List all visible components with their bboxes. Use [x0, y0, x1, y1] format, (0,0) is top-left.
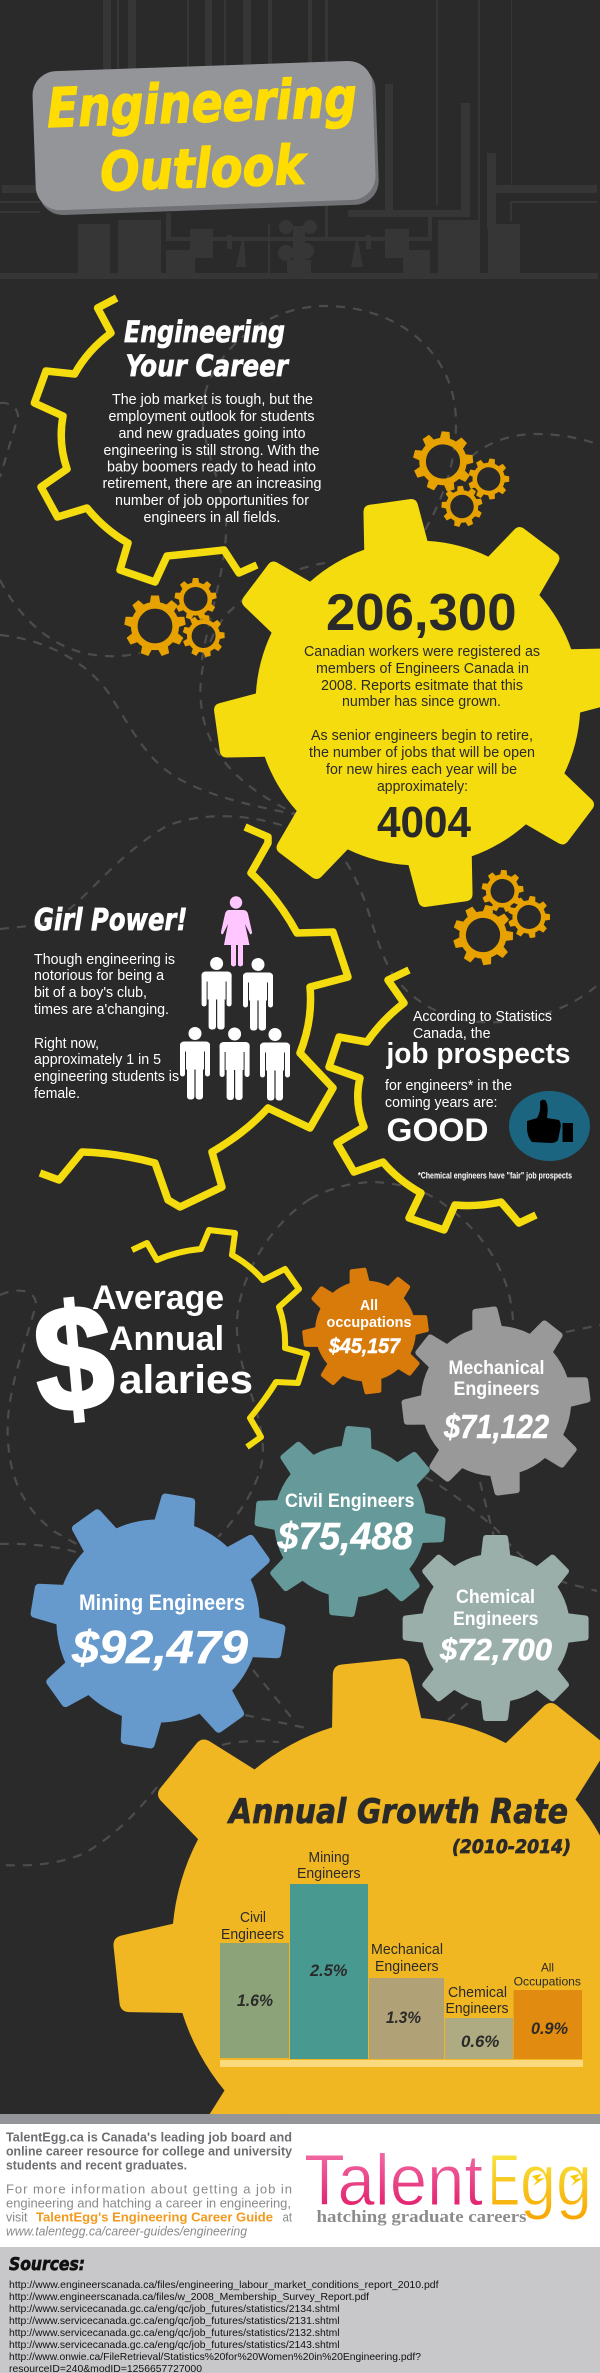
job prospects intro: Canada, the — [413, 1026, 490, 1042]
outline gear: girl power — [40, 827, 348, 1207]
job prospects intro — [385, 1009, 552, 1111]
bar chart: Engineers — [375, 1959, 439, 1975]
girl power paragraph: times are a'changing. — [34, 1002, 169, 1018]
gear: mechanical engineers salary: Engineers — [454, 1379, 540, 1400]
stat description: members of Engineers Canada in — [316, 661, 529, 677]
gear: chemical engineers salary — [403, 1535, 589, 1721]
panel: engineering your career — [34, 298, 322, 582]
stat description: approximately: — [377, 779, 468, 795]
heading: engineering your career: Engineering — [124, 315, 285, 349]
heading: average annual salaries — [92, 1279, 253, 1402]
sources list — [9, 2279, 439, 2373]
talentegg description: TalentEgg.ca is Canada's leading job board and — [6, 2130, 292, 2144]
sources list: http://www.onwie.ca/FileRetrieval/Statistics%20for%20Women%20in%20Engineering.pdf? — [9, 2351, 421, 2363]
bar chart: 0.6% — [461, 2032, 499, 2051]
job prospects heading: job prospects — [386, 1038, 570, 1070]
heading: average annual salaries: Annual — [109, 1320, 224, 1358]
icon: dollar sign: $ — [27, 1271, 120, 1445]
gear: mechanical engineers salary — [391, 1296, 600, 1506]
girl power paragraph — [34, 952, 179, 1102]
talentegg logo — [304, 2141, 592, 2226]
title text: Outlook — [99, 133, 309, 204]
girl power paragraph: engineering students is — [34, 1069, 179, 1085]
stat: 206,300: 206,300 — [326, 584, 516, 642]
talentegg description: For more information about getting a job in — [6, 2182, 292, 2196]
panel: job prospects — [329, 970, 590, 1230]
sources list: http://www.engineerscanada.ca/files/w_2008_Membership_Survey_Report.pdf — [9, 2291, 369, 2303]
bar chart: 0.9% — [531, 2019, 568, 2038]
panel: sources — [0, 2247, 600, 2373]
career paragraph — [102, 392, 322, 526]
chart heading: (2010-2014) — [452, 1836, 571, 1858]
heading: engineering your career — [124, 315, 289, 383]
sources list: http://www.servicecanada.gc.ca/eng/qc/job_futures/statistics/2134.shtml — [9, 2303, 340, 2315]
gear: mechanical engineers salary: $71,122 — [443, 1408, 550, 1445]
bar chart: Engineers — [221, 1927, 284, 1943]
stat description: number has since grown. — [342, 694, 501, 710]
chart heading — [226, 1792, 571, 1858]
stat description: the number of jobs that will be open — [309, 745, 535, 761]
talentegg description: www.talentegg.ca/career-guides/engineering — [6, 2224, 248, 2238]
rating: good: GOOD — [386, 1112, 488, 1148]
stat description: Canadian workers were registered as — [304, 644, 540, 660]
talentegg logo: E — [488, 2141, 520, 2221]
talentegg description — [6, 2130, 293, 2238]
heading: average annual salaries: alaries — [119, 1358, 253, 1402]
girl power paragraph: female. — [34, 1086, 80, 1102]
talentegg description: at — [282, 2210, 292, 2224]
outline gear: career — [34, 298, 257, 582]
panel: big yellow gear stats — [189, 474, 600, 932]
yellow gear — [189, 474, 600, 932]
bar chart: Occupations — [514, 1974, 581, 1988]
outline gear: job prospects — [329, 970, 536, 1230]
gear: all occupations salary — [295, 1261, 436, 1401]
gear: mechanical engineers salary: Mechanical — [448, 1358, 544, 1379]
career paragraph: engineers in all fields. — [144, 510, 280, 526]
gear: chemical engineers salary: Engineers — [453, 1609, 538, 1630]
job prospects intro: for engineers* in the — [385, 1078, 512, 1094]
panel: talentegg footer — [0, 2114, 600, 2247]
talentegg description: visit — [6, 2210, 28, 2224]
bar chart: Engineers — [446, 2001, 508, 2017]
sources list: http://www.servicecanada.gc.ca/eng/qc/job_futures/statistics/2131.shtml — [9, 2315, 340, 2327]
gear: all occupations salary: occupations — [326, 1315, 412, 1331]
sources list: http://www.servicecanada.gc.ca/eng/qc/job_futures/statistics/2143.shtml — [9, 2339, 340, 2351]
talentegg logo: Talent — [304, 2141, 483, 2221]
gear: mining engineers salary: $92,479 — [71, 1621, 248, 1673]
girl power paragraph: approximately 1 in 5 — [34, 1052, 161, 1068]
talentegg logo: gg — [520, 2141, 592, 2221]
icon: gear trio right — [447, 869, 554, 971]
sources list: http://www.servicecanada.gc.ca/eng/qc/job_futures/statistics/2132.shtml — [9, 2327, 340, 2339]
career paragraph: and new graduates going into — [118, 426, 306, 442]
career paragraph: baby boomers ready to head into — [107, 460, 316, 476]
gear: civil engineers salary: $75,488 — [277, 1516, 414, 1558]
heading: girl power: Girl Power! — [34, 903, 188, 938]
girl power paragraph: bit of a boy's club, — [34, 985, 147, 1001]
panel: annual growth rate — [87, 1632, 600, 2258]
orange gear — [87, 1632, 600, 2258]
girl power paragraph: Though engineering is — [34, 952, 175, 968]
talentegg description: engineering and hatching a career in engineering, — [6, 2196, 291, 2210]
stat: 4004: 4004 — [377, 798, 472, 847]
icon: pink woman — [221, 896, 252, 966]
stat description — [304, 644, 540, 795]
career paragraph: engineering is still strong. With the — [104, 443, 320, 459]
stat description: As senior engineers begin to retire, — [311, 728, 533, 744]
gear: mining engineers salary — [12, 1475, 304, 1767]
outline gear: salaries — [132, 1230, 307, 1447]
talentegg description: online career resource for college and university — [6, 2144, 293, 2158]
title text — [46, 66, 360, 205]
sources heading: Sources: — [9, 2254, 85, 2275]
icon: gear trio top right — [410, 429, 513, 529]
gear: all occupations salary: All — [360, 1298, 378, 1314]
gear: civil engineers salary: Civil Engineers — [285, 1491, 414, 1512]
talentegg description: students and recent graduates. — [6, 2158, 187, 2172]
career paragraph: employment outlook for students — [108, 409, 314, 425]
bar chart: 1.6% — [237, 1991, 273, 2010]
talentegg logo: hatching graduate careers — [316, 2207, 527, 2226]
bar chart: Civil — [240, 1910, 266, 1926]
bar chart — [220, 1850, 583, 2067]
talentegg description: TalentEgg's Engineering Career Guide — [36, 2210, 273, 2224]
job prospects intro: coming years are: — [385, 1095, 498, 1111]
career paragraph: retirement, there are an increasing — [102, 476, 322, 492]
gear: all occupations salary: $45,157 — [328, 1335, 401, 1358]
bar chart: 1.3% — [386, 2008, 421, 2027]
stat description: for new hires each year will be — [326, 762, 517, 778]
gear: chemical engineers salary: Chemical — [456, 1587, 535, 1608]
title text: Engineering — [46, 66, 358, 140]
career paragraph: The job market is tough, but the — [112, 392, 313, 408]
girl power paragraph: notorious for being a — [34, 968, 165, 984]
bar chart: Mining — [308, 1850, 350, 1866]
heading: engineering your career: Your Career — [126, 349, 289, 383]
bar chart: All — [541, 1960, 554, 1974]
bar chart: Chemical — [448, 1985, 507, 2001]
girl power paragraph: Right now, — [34, 1036, 99, 1052]
job prospects intro: According to Statistics — [413, 1009, 552, 1025]
career paragraph: number of job opportunities for — [115, 493, 309, 509]
icon: thumbs up — [509, 1091, 590, 1161]
background machinery illustration — [0, 0, 598, 279]
icon: gear trio left — [124, 578, 228, 660]
title panel — [32, 60, 380, 216]
gear: civil engineers salary — [247, 1419, 453, 1624]
bar chart: Mechanical — [371, 1942, 443, 1958]
bar chart: 2.5% — [309, 1961, 348, 1980]
heading: average annual salaries: Average — [92, 1279, 224, 1317]
sources list: http://www.engineerscanada.ca/files/engineering_labour_market_conditions_report_2010.pdf — [9, 2279, 439, 2291]
panel: girl power — [34, 827, 348, 1207]
dashed connector lines — [0, 306, 600, 1865]
stat description: 2008. Reports esitmate that this — [321, 678, 523, 694]
icon: five men — [180, 957, 290, 1100]
gear: chemical engineers salary: $72,700 — [439, 1632, 552, 1667]
gear: mining engineers salary: Mining Engineers — [79, 1590, 245, 1615]
bar chart: Engineers — [297, 1866, 360, 1882]
panel: average annual salaries heading — [27, 1230, 307, 1447]
